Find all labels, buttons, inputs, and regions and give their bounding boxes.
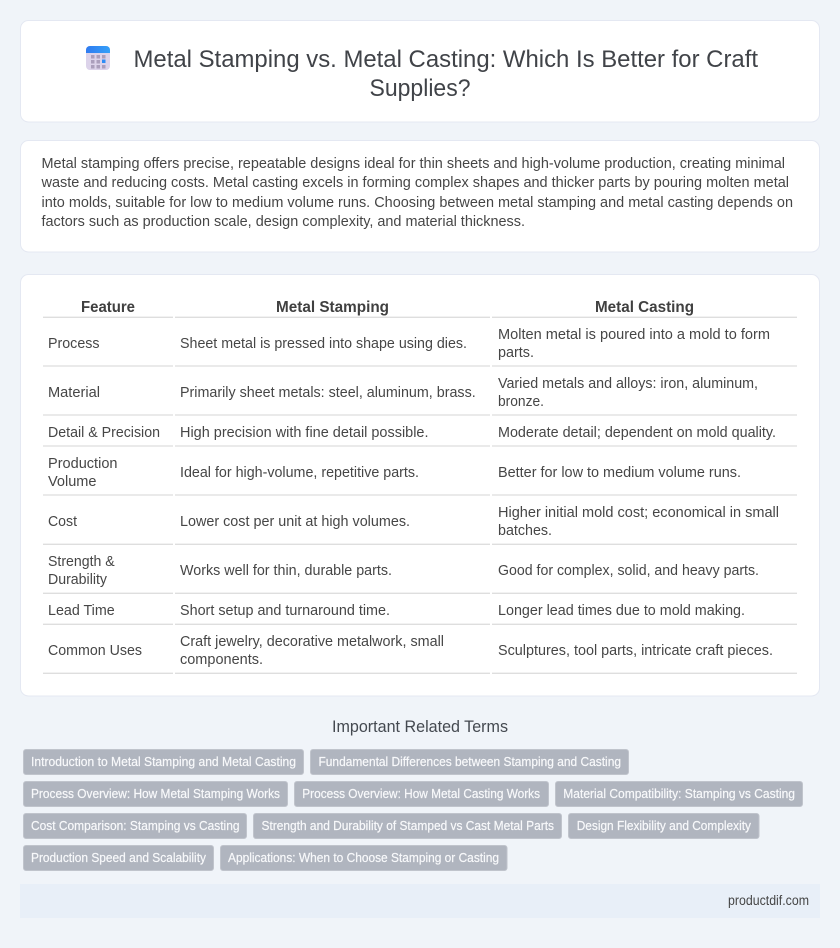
row: material: Primarily sheet metals: steel, aluminum, brass. xyxy=(180,385,476,401)
tag: design flexibility xyxy=(568,814,759,838)
row: strength and durability: Durability xyxy=(48,572,108,588)
row: cost: Higher initial mold cost; economical in small xyxy=(498,505,779,521)
tag: cost comparison: Cost Comparison: Stamping vs Casting xyxy=(31,819,240,833)
intro text: Metal stamping offers precise, repeatable designs ideal for thin sheets and high-volume production, creating minimal xyxy=(42,156,785,172)
row: lead time: Short setup and turnaround time. xyxy=(180,603,390,619)
title: Supplies? xyxy=(370,75,470,102)
row: production volume: Production xyxy=(48,456,118,472)
table header row: Feature xyxy=(81,299,135,316)
row: process xyxy=(48,327,770,361)
row: common uses: Craft jewelry, decorative metalwork, small xyxy=(180,634,444,650)
tag: casting process xyxy=(294,782,548,806)
tag: fundamental differences xyxy=(310,750,628,774)
tag: cost comparison xyxy=(24,814,246,838)
tag: introduction xyxy=(24,750,304,774)
intro text xyxy=(41,156,793,230)
row: production volume: Volume xyxy=(48,474,96,490)
row: process: parts. xyxy=(498,345,534,361)
row: detail and precision: High precision with fine detail possible. xyxy=(180,425,428,441)
heading: important related terms: Important Related Terms xyxy=(332,718,508,736)
row: cost xyxy=(48,505,779,539)
row: strength and durability: Works well for thin, durable parts. xyxy=(180,563,392,579)
row: production volume xyxy=(48,456,741,490)
footer xyxy=(20,884,820,918)
tag: fundamental differences: Fundamental Differences between Stamping and Casting xyxy=(318,755,621,769)
tag: production speed xyxy=(24,846,214,870)
row: material: bronze. xyxy=(498,394,544,410)
row: process: Process xyxy=(48,336,100,352)
intro text: into molds, suitable for low to medium volume runs. Choosing between metal stamping and metal casting depends on xyxy=(42,195,793,211)
row: lead time: Lead Time xyxy=(48,603,115,619)
row: strength and durability xyxy=(48,554,759,588)
tag: applications: Applications: When to Choose Stamping or Casting xyxy=(228,851,499,865)
row: common uses: Common Uses xyxy=(48,643,142,659)
panel: introduction xyxy=(20,140,820,252)
tag: material compatibility xyxy=(556,782,802,806)
row: detail and precision xyxy=(48,425,776,441)
title: Metal Stamping vs. Metal Casting: Which Is Better for Craft xyxy=(134,46,758,73)
row: detail and precision: Detail & Precision xyxy=(48,425,160,441)
panel: comparison table xyxy=(20,274,820,696)
row: cost: Lower cost per unit at high volumes. xyxy=(180,514,410,530)
tag: production speed: Production Speed and Scalability xyxy=(31,851,207,865)
tag: design flexibility: Design Flexibility and Complexity xyxy=(577,819,752,833)
tag: strength and durability: Strength and Durability of Stamped vs Cast Metal Parts xyxy=(262,819,554,833)
panel: header xyxy=(20,20,820,122)
row: material: Varied metals and alloys: iron, aluminum, xyxy=(498,376,758,392)
table header row xyxy=(81,299,694,316)
tag: strength and durability xyxy=(254,814,562,838)
row: process: Sheet metal is pressed into shape using dies. xyxy=(180,336,467,352)
row: cost: Cost xyxy=(48,514,77,530)
table header row: Metal Casting xyxy=(595,299,694,316)
table header row: Metal Stamping xyxy=(276,299,389,316)
row: strength and durability: Good for complex, solid, and heavy parts. xyxy=(498,563,759,579)
row: common uses xyxy=(48,634,773,668)
tag: stamping process: Process Overview: How Metal Stamping Works xyxy=(31,787,280,801)
row: common uses: Sculptures, tool parts, intricate craft pieces. xyxy=(498,643,773,659)
row: common uses: components. xyxy=(180,652,263,668)
intro text: factors such as production scale, design complexity, and material thickness. xyxy=(42,214,525,230)
row: material: Material xyxy=(48,385,100,401)
row: material xyxy=(48,376,758,410)
row: production volume: Better for low to medium volume runs. xyxy=(498,465,741,481)
row: process: Molten metal is poured into a mold to form xyxy=(498,327,770,343)
row: cost: batches. xyxy=(498,523,552,539)
row: production volume: Ideal for high-volume, repetitive parts. xyxy=(180,465,419,481)
row: lead time xyxy=(48,603,745,619)
related term tags xyxy=(24,750,802,870)
icon: calendar xyxy=(86,46,110,70)
tag: stamping process xyxy=(24,782,288,806)
row: strength and durability: Strength & xyxy=(48,554,115,570)
row: lead time: Longer lead times due to mold making. xyxy=(498,603,745,619)
intro text: waste and reducing costs. Metal casting excels in forming complex shapes and thicker parts by pouring molten metal xyxy=(41,175,789,191)
tag: casting process: Process Overview: How Metal Casting Works xyxy=(302,787,540,801)
tag: introduction: Introduction to Metal Stamping and Metal Casting xyxy=(31,755,296,769)
tag: applications xyxy=(220,846,507,870)
footer: productdif.com xyxy=(728,893,809,908)
row: detail and precision: Moderate detail; dependent on mold quality. xyxy=(498,425,776,441)
title xyxy=(134,46,758,102)
tag: material compatibility: Material Compatibility: Stamping vs Casting xyxy=(563,787,795,801)
